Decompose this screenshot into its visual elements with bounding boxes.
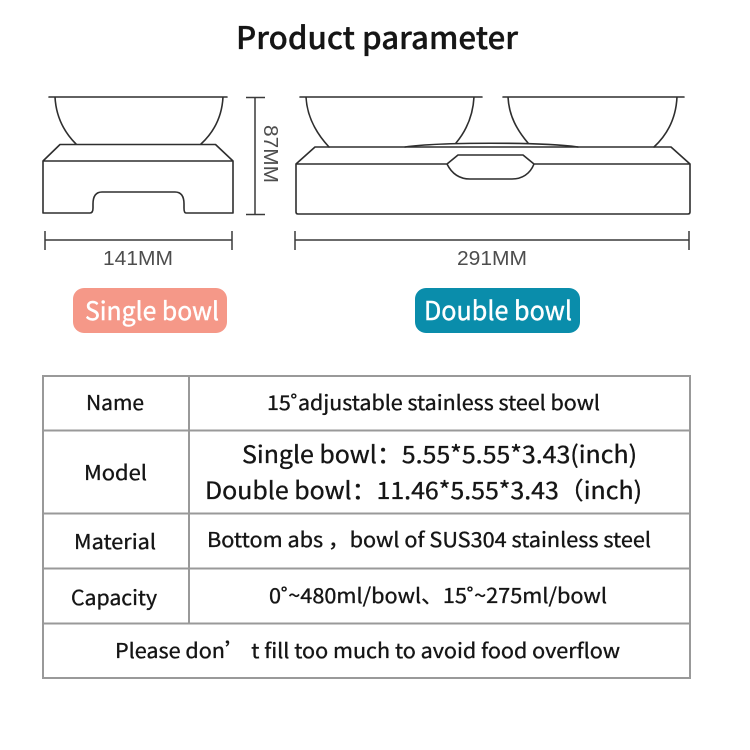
dimension: width 141MM <box>45 231 232 270</box>
dimension: width 291MM <box>295 231 689 270</box>
dimension: width 291MM: 291MM <box>457 248 527 270</box>
double bowl: stand with handle <box>296 147 690 214</box>
row: model: Model <box>84 456 147 486</box>
parameter table <box>43 376 690 678</box>
diagram: double bowl side view <box>296 97 690 214</box>
double bowl: centre plate <box>405 143 578 147</box>
diagram: single bowl side view <box>43 97 233 213</box>
table grid <box>43 376 690 678</box>
row: material: Material <box>74 525 156 555</box>
row: capacity <box>71 579 607 611</box>
row: name <box>86 386 600 416</box>
row: material: Bottom abs ，bowl of SUS304 stainless steel <box>207 523 651 553</box>
row: name: 15˚adjustable stainless steel bowl <box>267 386 600 416</box>
row: material <box>74 523 651 555</box>
dimension: width 141MM: 141MM <box>103 248 173 270</box>
row: note: Please don’ t fill too much to avoid food overflow <box>115 634 620 664</box>
row: model: Double bowl：11.46*5.55*3.43（inch) <box>205 471 642 506</box>
button: double bowl: Double bowl <box>424 291 572 328</box>
row: name: Name <box>86 386 144 416</box>
row: capacity: 0˚~480ml/bowl、15˚~275ml/bowl <box>269 579 607 609</box>
title: Product parameter <box>236 13 518 58</box>
double bowl: left bowl <box>300 97 482 147</box>
dimension: height 87MM: 87MM <box>259 125 281 183</box>
row: model: Single bowl：5.55*5.55*3.43(inch) <box>242 435 637 470</box>
row: model <box>84 435 642 506</box>
dimension: height 87MM <box>246 97 281 214</box>
double bowl: right bowl <box>503 97 684 147</box>
single bowl: bowl <box>49 97 227 144</box>
single bowl: stand <box>43 144 233 213</box>
row: capacity: Capacity <box>71 581 157 611</box>
button: single bowl: Single bowl <box>85 292 219 328</box>
